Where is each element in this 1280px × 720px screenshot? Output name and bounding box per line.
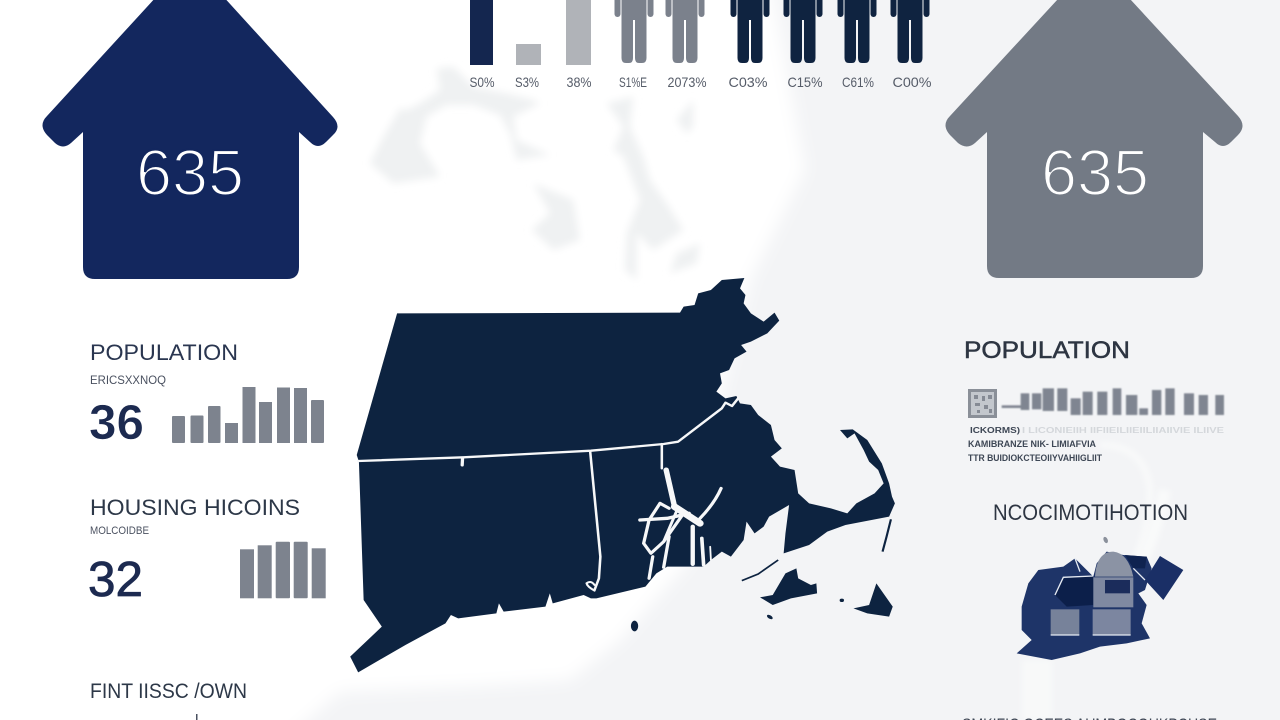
map landmass <box>350 278 895 672</box>
icon: grey house with number: 635 <box>1041 136 1149 209</box>
bar chart <box>172 387 324 443</box>
panel: left population <box>89 340 324 450</box>
bar: dark <box>470 0 493 65</box>
panel: right regional thumbnail <box>993 500 1188 660</box>
chart tick <box>196 714 198 720</box>
map: county and state borders <box>358 398 738 591</box>
small caption: ERICSXXNOQ <box>90 375 166 387</box>
bar: short grey <box>516 44 541 65</box>
icon: qr-style square <box>970 390 996 416</box>
chart value labels <box>470 74 932 90</box>
blurred bar chart <box>1002 388 1224 415</box>
icon: grey house with number <box>946 0 1242 278</box>
chart value labels: 2073% <box>668 74 706 90</box>
icon: navy house with number: 635 <box>136 136 244 209</box>
chart value labels: S0% <box>470 74 494 90</box>
chart value labels: 38% <box>566 74 592 90</box>
map: islands <box>631 519 893 631</box>
chart value labels: C15% <box>788 74 822 90</box>
pictogram: grey people <box>614 0 704 63</box>
chart value labels: S1%E <box>619 74 647 90</box>
heading: town: FINT IISSC /OWN <box>90 679 247 703</box>
caption lines: TTR BUIDIOKCTEOIIYVAHIIGLIIT <box>968 453 1102 464</box>
top bar and pictogram chart <box>470 0 932 90</box>
bar chart <box>240 542 326 598</box>
thumbnail map <box>1017 536 1183 660</box>
caption lines: ICKORMS) <box>970 426 1020 435</box>
small caption: MOLCOIDBE <box>90 525 149 537</box>
bar: tall grey <box>566 0 591 65</box>
pictogram: navy people <box>730 0 930 63</box>
caption lines <box>968 426 1225 464</box>
heading: population: POPULATION <box>964 337 1130 364</box>
heading: population: POPULATION <box>90 340 238 365</box>
chart value labels: C00% <box>892 74 932 90</box>
panel: left housing <box>88 495 326 607</box>
icon: navy house with number <box>42 0 338 279</box>
faint background map <box>370 67 700 280</box>
big number: 36 <box>89 396 144 450</box>
chart value labels: S3% <box>515 74 539 90</box>
chart value labels: C61% <box>842 74 874 90</box>
map: southern New England <box>350 278 895 672</box>
heading: housing: HOUSING HICOINS <box>90 495 300 520</box>
caption lines: I LICONIEIIH IIFIIEILIIEIILIIAIIVIE ILIIVE <box>1022 426 1225 435</box>
panel: right population <box>964 337 1225 464</box>
caption lines: KAMIBRANZE NIK- LIMIAFVIA <box>968 439 1096 450</box>
chart value labels: C03% <box>728 74 768 90</box>
big number: 32 <box>88 553 143 607</box>
heading: location: NCOCIMOTIHOTION <box>993 500 1188 525</box>
